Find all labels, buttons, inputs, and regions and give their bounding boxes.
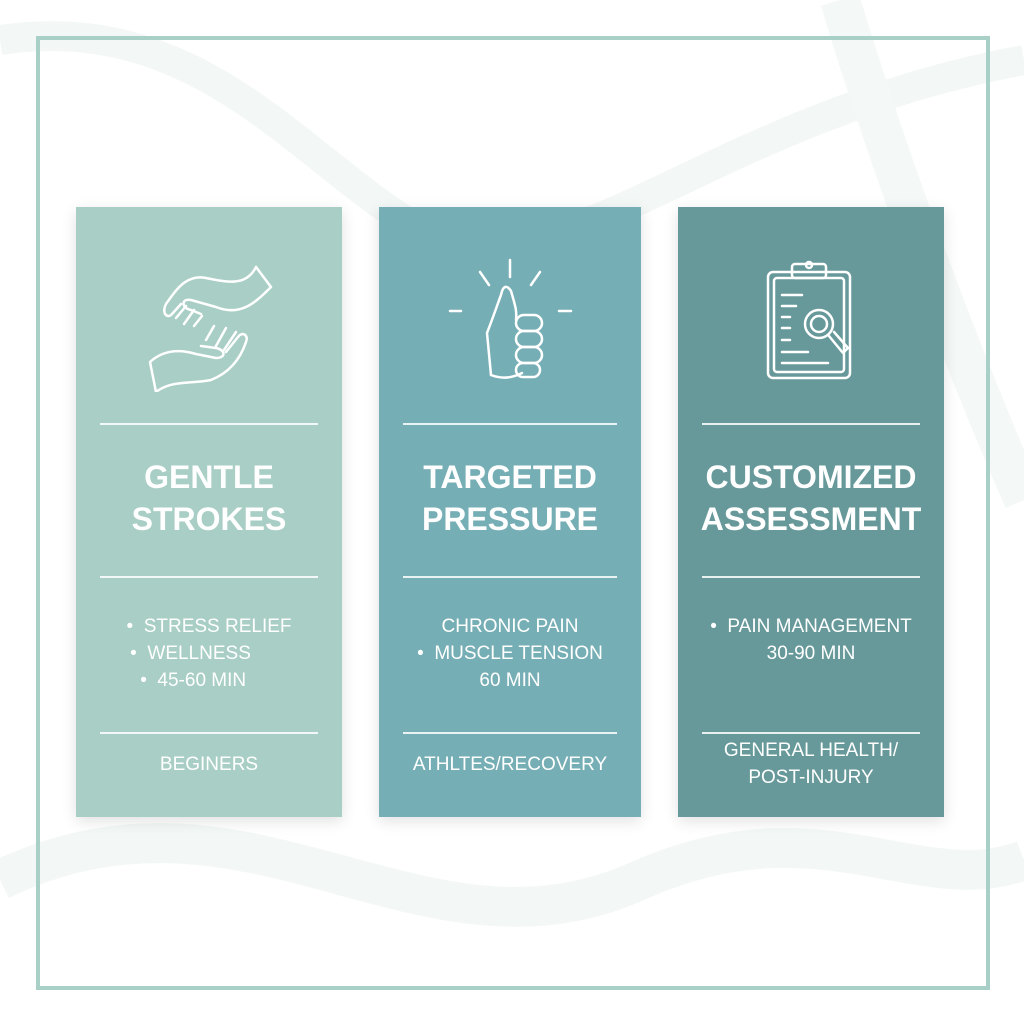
heading: GENTLE <box>144 459 274 495</box>
icon: thumbs up <box>448 258 572 379</box>
list <box>126 616 292 691</box>
heading: ASSESSMENT <box>701 501 921 537</box>
list: 60 MIN <box>479 670 541 691</box>
panel: targeted pressure <box>379 207 641 817</box>
heading <box>422 459 598 537</box>
footer: POST-INJURY <box>748 767 874 788</box>
footer: BEGINERS <box>160 754 258 775</box>
icon: hands <box>148 266 272 392</box>
list: • WELLNESS <box>130 643 251 664</box>
heading <box>701 459 921 537</box>
heading: PRESSURE <box>422 501 598 537</box>
list: • 45-60 MIN <box>140 670 246 691</box>
list: • MUSCLE TENSION <box>417 643 603 664</box>
footer: GENERAL HEALTH/ <box>724 740 898 761</box>
heading: TARGETED <box>423 459 597 495</box>
footer: ATHLTES/RECOVERY <box>413 754 607 775</box>
heading <box>132 459 286 537</box>
panel: gentle strokes <box>76 207 342 817</box>
heading: STROKES <box>132 501 286 537</box>
panel: customized assessment <box>678 207 944 817</box>
list: CHRONIC PAIN <box>442 616 578 637</box>
icon: clipboard <box>766 260 852 380</box>
list <box>710 616 912 664</box>
list: 30-90 MIN <box>767 643 855 664</box>
footer <box>724 740 898 788</box>
list <box>417 616 603 691</box>
list: • PAIN MANAGEMENT <box>710 616 912 637</box>
list: • STRESS RELIEF <box>126 616 292 637</box>
heading: CUSTOMIZED <box>706 459 916 495</box>
